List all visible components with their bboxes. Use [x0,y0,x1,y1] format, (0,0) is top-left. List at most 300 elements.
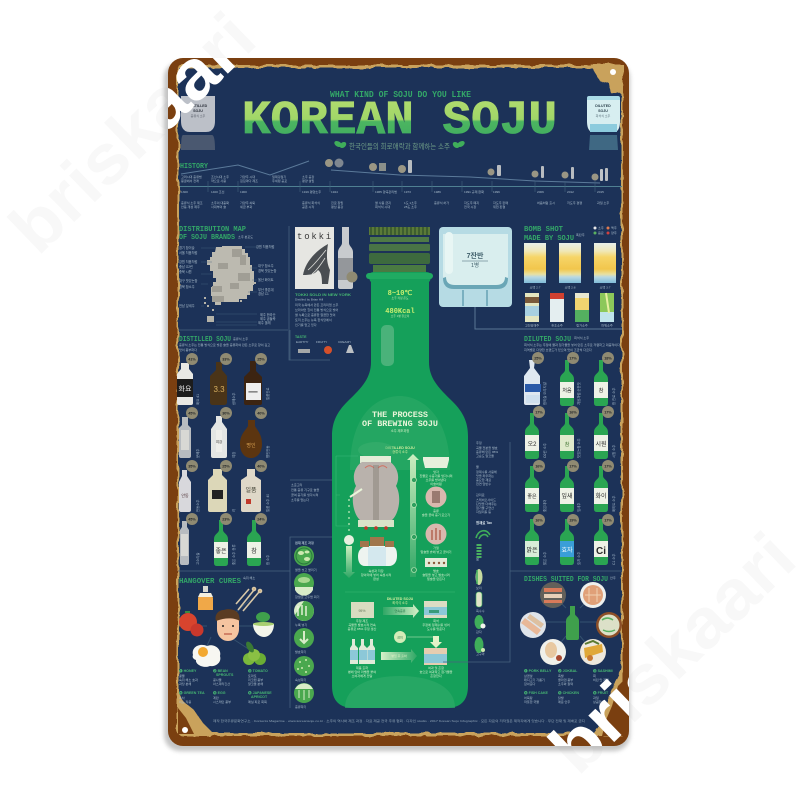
hangover cure captions: 숙취 해소 효과 [179,677,198,682]
timeline captions: 소주의 대중화 [211,200,229,205]
process captions: 숙성하기 [295,677,307,682]
timeline captions: 1986 [434,190,441,194]
diluted alcohol badges: 17% [569,464,577,468]
timeline captions: 소주 공장 [302,174,314,179]
calories: 480Kcal [385,308,415,316]
diluted description: 지역별로 다양한 브랜드가 있으며 맛이 조금씩 다르다 [524,347,592,352]
distilled vertical captions: 삼해소주 [231,393,236,405]
diluted alcohol badges: 25% [534,356,542,360]
right process steps: 술을 끓여 증기 모으기 [422,512,450,517]
timeline captions: 증류식 희석식 [302,200,320,205]
taste icons: FRUITY [316,340,327,344]
distillate droplets and stem [343,499,355,578]
map brand labels: 제주 곱들락 [260,316,276,321]
right process steps: 가열 [433,545,439,550]
distilled soju cup: 증류식 소주 [191,113,206,118]
ingredient notes: 맛을 좌우하는 [476,473,494,478]
map brand labels [179,244,277,325]
serving temperature: 8~10℃ [388,289,412,298]
timeline captions: 자도주 폐지 [464,200,479,205]
diluted bottles row 4 [525,519,608,565]
distilled alcohol badges: 25% [257,358,265,362]
timeline captions: 25도 소주 [404,205,417,209]
diluted bottles row 4: 맑은 [526,546,538,554]
connector lines [533,595,609,652]
bottle collar and highlights [336,276,455,708]
diluted alcohol badges: 16% [535,464,543,468]
connector lines [190,595,262,650]
callout: still description: 소주를 얻는다 [291,497,309,502]
timeline captions: 처음처럼 출시 [537,200,555,205]
heading: distilled soju process: DISTILLED SOJU [385,446,415,450]
panel: hangover cures [179,575,274,704]
diluted alcohol badges: 17% [569,356,577,360]
distilled alcohol badges: 41% [188,358,196,362]
diluted vertical captions: 맑은 소주 [542,552,547,565]
icon: green tea cup [253,612,274,637]
main title: KOREAN SOJU [242,95,557,148]
process captions: 찹쌀로 고두밥 찌기 [295,594,320,599]
dish captions: ❸ SASHIMI [593,668,613,673]
ingredient notes: 천연 암반수 [476,481,491,486]
column frame [443,442,622,662]
bottle body [332,272,468,708]
diluted captions bottom: 혼합한다 [430,673,442,678]
right process steps: 찬물로 수증기를 냉각시켜 [419,473,453,478]
still pot [350,442,399,530]
panel: diluted soju: 희석식 소주 [574,335,589,340]
hangover cure captions: 녹차 [179,695,185,700]
illustration: green soju bottle: 소주 1병 칼로리 [391,314,410,318]
arrow: bottling [381,649,417,663]
tokki body text: 미국 뉴욕에서 만든 프리미엄 소주 [295,302,338,307]
diluted captions top: 주정에 정제수를 섞어 [422,622,450,627]
arrow: bottling: 병입 후 출하 [391,653,407,658]
ingredient notes: 감미료 [476,492,485,497]
timeline captions: 1400 조선 [211,189,225,194]
heading: hangover cures: HANGOVER CURES [179,578,241,586]
diluted alcohol badges: 18% [604,356,612,360]
illustration: shot glass: 7잔반 [467,251,484,260]
heading: distilled soju: DISTILLED SOJU [179,336,231,344]
bottle cap [369,227,430,273]
distilled alcohol badges: 45% [188,412,196,416]
timeline captions: 과일 소주 [597,200,609,205]
diluted bottles row 1: 참 [599,387,604,394]
dish captions: 매운 안주 [558,699,570,704]
callout: still description [290,480,336,502]
diluted bottles row 3: 화이 [595,492,607,500]
taste icons: TASTE [295,335,307,339]
legend: 양주 [611,230,617,235]
map brand labels: 충남 O2린 [179,264,193,269]
process captions: 쌀을 씻고 불리기 [295,567,317,572]
metal sign plate [168,58,629,746]
diluted captions top: 곡물을 발효시켜 연속 [348,622,376,627]
dish captions: 잡아준다 [524,681,536,686]
distilled vertical captions: 안동소주 [195,500,200,512]
heading: diluted soju process: DILUTED SOJU [387,597,414,601]
hangover cure captions: ❹ GREEN TEA [179,691,205,695]
jars caption: 완성 [373,576,379,581]
icon: bean sprouts and ginseng [236,588,262,611]
diluted bottles row 3: 좋은 [527,494,537,500]
map brand labels: 제주 올래 [258,320,271,325]
diluted vertical captions: 좋은데이 [542,500,547,512]
map of South Korea [207,246,254,305]
timeline captions: 1996 [493,190,500,194]
timeline captions: 자도주 판매 [493,200,508,205]
diluted soju cup: 희석식 소주 [596,113,611,118]
timeline captions: 몽골에서 전래 [181,178,199,183]
timeline captions: 사대부의 술 [211,204,226,209]
finished bottles [350,639,375,664]
timeline ticks [208,181,595,192]
dish captions [524,668,613,704]
distilled vertical captions: 고소리술 [195,553,200,565]
distilled bottles row 2 [179,416,262,458]
heading: distribution map: DISTRIBUTION MAP [179,226,246,234]
panel: distribution map [179,226,277,325]
watermark: top left on plate: briskaari [0,0,270,268]
diluted bottles row 3 [525,466,608,512]
map brand labels: 부산 좋은데 [258,287,274,292]
legend: 소주 [598,226,604,230]
icon: honey bottle [198,586,213,610]
panel: hangover cures: 숙취 해소 [243,575,255,580]
icon: fried egg [193,645,220,667]
diluted vertical captions: 처음처럼 순한맛 [576,382,581,405]
distilled bottles row 2: 명인 [246,442,256,449]
timeline captions: 세금 부과 [240,204,252,209]
jars caption: 항아리에 넣어 숙성시켜 [361,572,391,577]
dish captions: 닭발 [558,695,564,700]
panel: bomb shot [524,225,617,328]
timeline captions: 2015 [597,190,604,194]
distilled bottles row 3: 안동 [181,492,189,498]
hangover cure captions: ❻ JAPANESE [248,690,272,695]
hangover cure captions: ❺ EGG [213,690,226,695]
panel: raw material process column: 원재 제조 과정 [295,540,314,545]
timeline captions: 약으로 사용 [211,178,226,183]
timeline captions: 1991 규제 완화 [464,189,484,194]
distilled soju cup [181,96,215,150]
diluted alcohol badges: 16% [535,518,543,522]
ingredient labels [476,556,485,656]
distilled alcohol badges: 33% [222,358,230,362]
diluted alcohol badges: 16% [569,410,577,414]
timeline captions: 1300 [181,190,188,194]
beer glass labels: 소맥 2:7 [530,284,541,290]
hangover cure captions: 과당 분해 [179,681,191,686]
additive circle: 감미 [397,634,403,640]
raw alcohol box [351,602,374,618]
map brand labels: 울산 화이트 [258,277,274,282]
diluted captions top [348,618,450,631]
diluted vertical captions: 시원 소주 [611,445,616,458]
map brand labels: 대구 맛있는참 [179,278,198,283]
panel: raw material process column [290,537,336,709]
arrow: distillation [383,604,419,618]
ingredient icons [474,531,490,653]
ingredient notes: 스테비오사이드 [476,497,496,502]
timeline captions: 2006 [537,190,544,194]
title kicker: WHAT KIND OF SOJU DO YOU LIKE [330,90,472,100]
diluted alcohol badges: 17% [535,410,543,414]
distilled alcohol badges: 25% [222,464,230,468]
taste icons: EARTHY [296,340,308,344]
dish captions: ❶ PORK BELLY [524,669,552,673]
small glass labels [525,322,613,328]
heading: distilled soju process: 증류식 소주 [392,449,408,454]
distilled soju cup: DISTILLED [189,104,208,108]
diluted captions bottom: 여과 및 혼합 [428,665,444,670]
dish captions: 회 [593,673,596,678]
icon: japanese apricots [243,640,266,665]
hangover cure captions: 이뇨 작용 [179,699,191,704]
hangover cure captions: 콩나물 [213,677,222,682]
timeline captions: 1965 양곡관리법 [375,189,397,194]
timeline captions: 가양주 시대 [240,174,255,179]
diluted vertical captions [542,382,616,565]
map regions [212,249,250,302]
panel: distribution map: OF SOJU BRANDS [179,234,235,242]
ingredient notes [476,440,498,525]
map brand labels: 경북 맛있는참 [258,268,277,273]
distilled vertical captions: 화요 41 [195,394,200,405]
timeline captions: 평남 용강 [331,204,343,209]
process circles [294,546,314,703]
dish captions: 과일 [593,695,599,700]
timeline captions: 공존 시작 [302,204,314,209]
dish captions: 비린 맛 제거 [593,677,609,682]
process captions [295,567,320,709]
dish captions: 어묵탕 [524,695,533,700]
ingredient labels: 고구마 [476,651,485,656]
distilled vertical captions: 일품진로 [265,388,270,400]
timeline axis [180,186,622,188]
icon: tomatoes [179,611,204,636]
diluted captions bottom: 병에 담아 라벨을 붙여 [348,669,376,674]
timeline captions: 쌀 사용 금지 [375,200,391,205]
panel: bomb shot: 폭탄주 [576,232,585,237]
diluted captions top: 희석 [433,618,439,623]
distilled alcohol badges: 30% [222,412,230,416]
center bottle [566,606,579,640]
diluted alcohol badges: 17% [604,518,612,522]
ingredient notes: 증류해 만든 95% [476,449,498,454]
distilled alcohol badges: 24% [257,518,265,522]
island pixels and Jeju [204,282,256,322]
right process steps: 술밑을 넣고 발효시켜 [422,572,450,577]
heading: process of brewing soju: THE PROCESS [372,410,428,420]
blending tank [424,648,447,665]
ingredient labels: 옥수수 [476,608,485,613]
diluted vertical captions: O2린 소주 [542,443,547,458]
timeline captions: 1도 1소주 [404,201,417,205]
diluted bottles row 2: 오2 [528,441,537,448]
panel: ingredients column [443,440,622,662]
hangover cure captions: 계란 [213,695,219,700]
heading: diluted soju process [387,597,414,605]
heading: distilled soju process [385,446,415,454]
dish captions: 소주와 찰떡 [558,681,573,686]
diluted captions bottom: 제품 출하 [356,665,368,670]
heading: process of brewing soju: 소주 제조과정 [391,428,409,433]
beer glasses [524,243,616,283]
plate shadow [164,62,630,751]
diluted soju cup [587,96,620,150]
watermark: bottom right on plate: briskaari [534,518,800,788]
tokki poster: tokki [297,232,333,242]
distilled soju cup: SOJU [193,109,203,113]
raw alcohol box: 95% [358,609,366,613]
timeline captions: 일제강점기 [272,174,286,179]
hangover cure captions: SPROUTS [216,673,234,677]
callout: still description: 전통 증류 기구로 술을 [291,487,319,492]
ingredient notes: 곡물 전분을 발효 [476,445,498,450]
panel: history timeline [180,158,622,209]
diluted bottles row 2: 시원 [595,440,607,448]
diluted vertical captions: 화이트 소주 [611,495,616,512]
diluted bottles row 2: 참 [565,441,570,448]
distilled bottles row 1: 3.3 [213,385,225,394]
diluted vertical captions: 참 진로 소주 [611,388,616,405]
diluted vertical captions: C1 소주 [611,553,616,565]
map brand labels: 경기 참이슬 [179,245,195,250]
timeline captions: 저도주 경쟁 [567,200,582,205]
vertical heat arrow [407,454,419,577]
tokki body text: Distilled by Brian Hill [295,298,324,302]
beer glass labels: 소맥 2:8 [565,284,576,290]
timeline captions: 1900 [240,190,247,194]
timeline captions: 증류식 소주 제조 [181,200,203,205]
timeline captions: 진로 창립 [331,200,343,205]
panel border [289,226,330,360]
dish captions: 족발 [558,673,564,678]
watermark: bottom right faint on background: briskaari [534,518,800,788]
illustration: shot glass: 1병 [471,261,479,269]
jars caption [361,568,391,581]
ingredient notes: 첨가물 구연산 [476,505,494,510]
distilled vertical captions: 좋은 소주 증류 [231,544,236,565]
callout: still description: 끓여 증기를 냉각시켜 [291,492,318,497]
distilled vertical captions: 일품 소주 40 [265,494,270,512]
diluted alcohol badges: 17% [604,464,612,468]
heading: dishes suited: DISHES SUITED FOR SOJU [524,576,608,584]
right process steps: 밑술을 솥에 넣고 끓이기 [420,549,452,554]
process captions: 누룩 넣기 [295,622,307,627]
legend: 맥주 [611,225,617,230]
illustration: green soju bottle [332,227,468,708]
title block [242,90,557,151]
hangover cure captions [179,668,272,704]
tokki bottle [338,227,358,289]
additive circle [394,631,433,643]
diluted alcohol badges: 19% [569,518,577,522]
map brand labels: 서울 처음처럼 [179,250,198,255]
diluted alcohol badges [532,352,614,526]
dish plates [520,582,622,665]
ingredient notes: 주정 [476,440,482,445]
panel: distilled soju: 증류식 소주 [233,336,248,341]
tank [424,601,447,618]
timeline captions: 2012 [567,190,574,194]
illustration: shot glass [439,227,512,307]
ingredient labels: 감자 [476,629,482,634]
right process steps [419,457,453,581]
right process steps: 발효 [433,568,439,573]
footer credits: 제작 한국주류문화연구소 · Contents Magazine · www.koreansoju.co.kr · 소주의 역사와 제조 과정 · 자료 제공 전국 주류 협회 · 디자인 studio · 2017 Korean Soju Infographic · 모든 자료의 저작권은 제작자에게 있습니다 · 무단 전재 및 재배포 금지 [213,718,585,723]
ingredient labels: 보리 [476,585,482,590]
distilled bottles row 1: 一 [248,388,258,399]
arrow: distillation: 연속증류 [394,608,406,613]
hangover cure captions: 꿀물 [179,673,185,678]
distilled vertical captions [195,388,270,565]
hangover cure captions: ❷ BEAN [213,669,228,673]
heading: diluted soju: DILUTED SOJU [524,336,571,344]
dish captions: ❹ FISH CAKE [524,691,549,695]
ingredient notes: 정제수를 사용해 [476,469,497,474]
diluted captions top: 도수를 맞춘다 [427,626,445,631]
distilled description [179,342,270,352]
timeline captions: 가양주 쇠퇴 [240,200,255,205]
collection jars [358,537,397,566]
tokki body text: 토끼 소주는 뉴욕 한식당에서 [295,317,332,322]
map brand labels: 전남 잎새주 [179,303,195,308]
distilled vertical captions: 참 소주 [265,555,270,565]
dish captions: 상큼한 맛 [593,699,605,704]
small bomb glasses [525,293,614,322]
hangover cure captions: ❶ HONEY [179,669,197,673]
heading: diluted soju process: 희석식 소주 [392,600,408,605]
heading: process of brewing soju: OF BREWING SOJU [362,419,438,429]
hangover cure captions: APRICOT [251,695,268,699]
process captions: 증류하기 [295,704,307,709]
diluted captions bottom [348,665,453,678]
dish captions: 삼겹살 [524,673,533,678]
diluted captions bottom: 숯으로 여과하고 첨가물을 [419,669,453,674]
tokki body text: 쌀 누룩으로 증류한 깔끔한 맛의 [295,312,336,317]
distilled description: 맛이 풍부하다 [179,347,197,352]
timeline captions: 조선시대 소주 [211,174,229,179]
tokki body text [295,298,338,327]
ingredient notes: 물 [476,464,479,469]
Korean subtitle: 한국인들의 희로애락과 함께하는 소주 [349,141,450,151]
map brand labels: 경남 C1 [258,291,269,296]
small glass labels: 홍초소주 [551,322,563,328]
dish captions: ❻ FRUIT [593,690,609,695]
distilled bottles row 4: 참 [251,547,257,555]
map brand labels: 제주 한라산 [260,312,276,317]
hangover cure captions: 시스테인 풍부 [213,699,231,704]
icon: right leaves [452,140,466,149]
right process steps: 증류 [433,508,439,513]
hangover cure captions: 알코올 분해 [248,681,263,686]
panel: distribution map: 소주 분포도 [238,234,253,239]
ingredient notes: 중요한 재료 [476,477,491,482]
distilled bottles row 3: 일품 [245,486,257,494]
distilled vertical captions: 문배주 [195,449,200,458]
jars caption: 숙성과 저장 [368,568,384,573]
dish captions: 돼지고기 기름기 [524,677,545,682]
diluted vertical captions: 참이슬 오리지널 [542,382,547,405]
panel: bomb shot: MADE BY SOJU [524,235,574,243]
icon: face [216,609,240,641]
timeline captions: 평양 설립 [302,178,314,183]
beer glass labels: 소맥 3:7 [600,284,611,290]
distilled vertical captions: 려 [231,509,236,512]
